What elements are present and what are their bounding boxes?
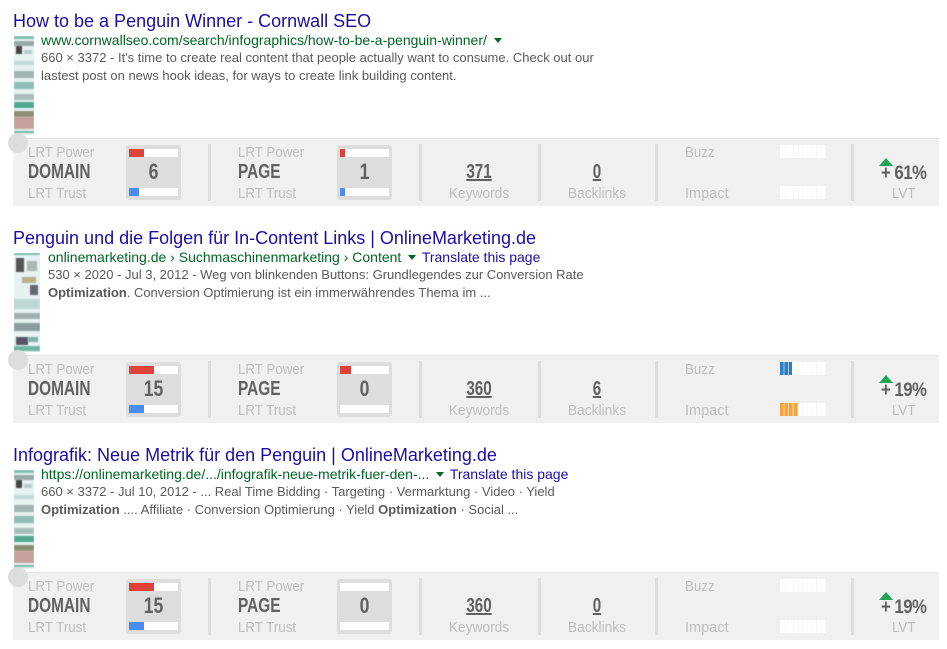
keywords label: Keywords bbox=[449, 403, 509, 419]
LVT value: + 19% bbox=[881, 596, 926, 618]
panel marker circle 1 bbox=[8, 133, 28, 153]
page score box bbox=[337, 362, 392, 417]
result 2 title: Penguin und die Folgen für In-Content Links | OnlineMarketing.de bbox=[13, 228, 536, 248]
domain score box bbox=[126, 362, 181, 417]
LRT Trust label: LRT Trust bbox=[28, 403, 86, 419]
LRT Trust label: LRT Trust bbox=[28, 620, 86, 636]
result 1 title: How to be a Penguin Winner - Cornwall SEO bbox=[13, 11, 371, 31]
page score box bbox=[337, 145, 392, 200]
page score box: 0 bbox=[360, 376, 369, 401]
result 2 thumbnail bbox=[14, 253, 40, 352]
backlinks count: 0 bbox=[593, 595, 601, 617]
domain score box: 15 bbox=[144, 376, 163, 401]
keywords count: 371 bbox=[466, 161, 492, 183]
domain label: DOMAIN bbox=[28, 161, 90, 183]
result 2 description: 530 × 2020 - Jul 3, 2012 - Weg von blinkenden Buttons: Grundlegendes zur Conversion Rate bbox=[48, 267, 584, 282]
panel marker circle 2 bbox=[8, 350, 28, 370]
result 3 title: Infografik: Neue Metrik für den Penguin | OnlineMarketing.de bbox=[13, 445, 497, 465]
LVT label: LVT bbox=[892, 403, 915, 419]
backlinks label: Backlinks bbox=[568, 403, 626, 419]
backlinks count: 6 bbox=[593, 378, 601, 400]
impact label: Impact bbox=[685, 403, 729, 419]
impact label: Impact bbox=[685, 186, 729, 202]
metrics panel 2 bbox=[13, 355, 939, 423]
domain label: DOMAIN bbox=[28, 595, 90, 617]
buzz label: Buzz bbox=[685, 362, 715, 378]
LRT Trust label: LRT Trust bbox=[28, 186, 86, 202]
domain score box bbox=[126, 579, 181, 634]
buzz meter bbox=[780, 579, 826, 592]
LVT label: LVT bbox=[892, 620, 915, 636]
buzz meter bbox=[780, 145, 826, 158]
panel marker circle 3 bbox=[8, 567, 28, 587]
domain score box: 6 bbox=[149, 159, 158, 184]
LVT up arrow bbox=[879, 375, 893, 383]
LVT value: + 19% bbox=[881, 379, 926, 401]
result 1 description: 660 × 3372 - It's time to create real content that people actually want to consume. Check out our bbox=[41, 50, 594, 65]
result 3 description: 660 × 3372 - Jul 10, 2012 - ... Real Time Bidding · Targeting · Vermarktung · Video · Yield bbox=[41, 484, 555, 499]
impact meter bbox=[780, 403, 826, 416]
result 3 description: Optimization .... Affiliate · Conversion Optimierung · Yield Optimization · Social ... bbox=[41, 502, 518, 516]
result 3 description bbox=[41, 484, 555, 516]
LRT Power label: LRT Power bbox=[238, 145, 304, 161]
page score box: 1 bbox=[360, 159, 369, 184]
LRT Trust label: LRT Trust bbox=[238, 403, 296, 419]
buzz meter bbox=[780, 362, 826, 375]
LRT Power label: LRT Power bbox=[28, 145, 94, 161]
page score box bbox=[337, 579, 392, 634]
domain score box bbox=[126, 145, 181, 200]
impact meter bbox=[780, 620, 826, 633]
keywords count: 360 bbox=[466, 378, 492, 400]
metrics panel 1 bbox=[13, 138, 939, 206]
LVT label: LVT bbox=[892, 186, 915, 202]
domain score box: 15 bbox=[144, 593, 163, 618]
page label: PAGE bbox=[238, 161, 281, 183]
impact meter bbox=[780, 186, 826, 199]
backlinks label: Backlinks bbox=[568, 186, 626, 202]
LRT Power label: LRT Power bbox=[238, 579, 304, 595]
LRT Power label: LRT Power bbox=[28, 362, 94, 378]
impact label: Impact bbox=[685, 620, 729, 636]
buzz label: Buzz bbox=[685, 145, 715, 161]
backlinks count: 0 bbox=[593, 161, 601, 183]
LRT Power label: LRT Power bbox=[28, 579, 94, 595]
result 3 url: https://onlinemarketing.de/.../infografik-neue-metrik-fuer-den-... Translate this page bbox=[41, 466, 568, 482]
result 2 description bbox=[48, 267, 584, 300]
domain label: DOMAIN bbox=[28, 378, 90, 400]
LRT Trust label: LRT Trust bbox=[238, 620, 296, 636]
result 1 description bbox=[41, 50, 594, 82]
keywords count: 360 bbox=[466, 595, 492, 617]
result 2 url: onlinemarketing.de › Suchmaschinenmarketing › Content Translate this page bbox=[48, 249, 540, 265]
LVT value: + 61% bbox=[881, 162, 926, 184]
result 1 url: www.cornwallseo.com/search/infographics/how-to-be-a-penguin-winner/ bbox=[41, 32, 487, 48]
page label: PAGE bbox=[238, 378, 281, 400]
result 1 thumbnail bbox=[14, 36, 34, 135]
page label: PAGE bbox=[238, 595, 281, 617]
backlinks label: Backlinks bbox=[568, 620, 626, 636]
LRT Trust label: LRT Trust bbox=[238, 186, 296, 202]
result 2 description: Optimization. Conversion Optimierung ist ein immerwährendes Thema im ... bbox=[48, 284, 491, 300]
LVT up arrow bbox=[879, 158, 893, 166]
metrics panel 3 bbox=[13, 572, 939, 640]
buzz label: Buzz bbox=[685, 579, 715, 595]
page score box: 0 bbox=[360, 593, 369, 618]
LVT up arrow bbox=[879, 592, 893, 600]
keywords label: Keywords bbox=[449, 186, 509, 202]
keywords label: Keywords bbox=[449, 620, 509, 636]
result 1 description: lastest post on news hook ideas, for ways to create link building content. bbox=[41, 68, 457, 82]
LRT Power label: LRT Power bbox=[238, 362, 304, 378]
result 3 thumbnail bbox=[14, 470, 34, 569]
